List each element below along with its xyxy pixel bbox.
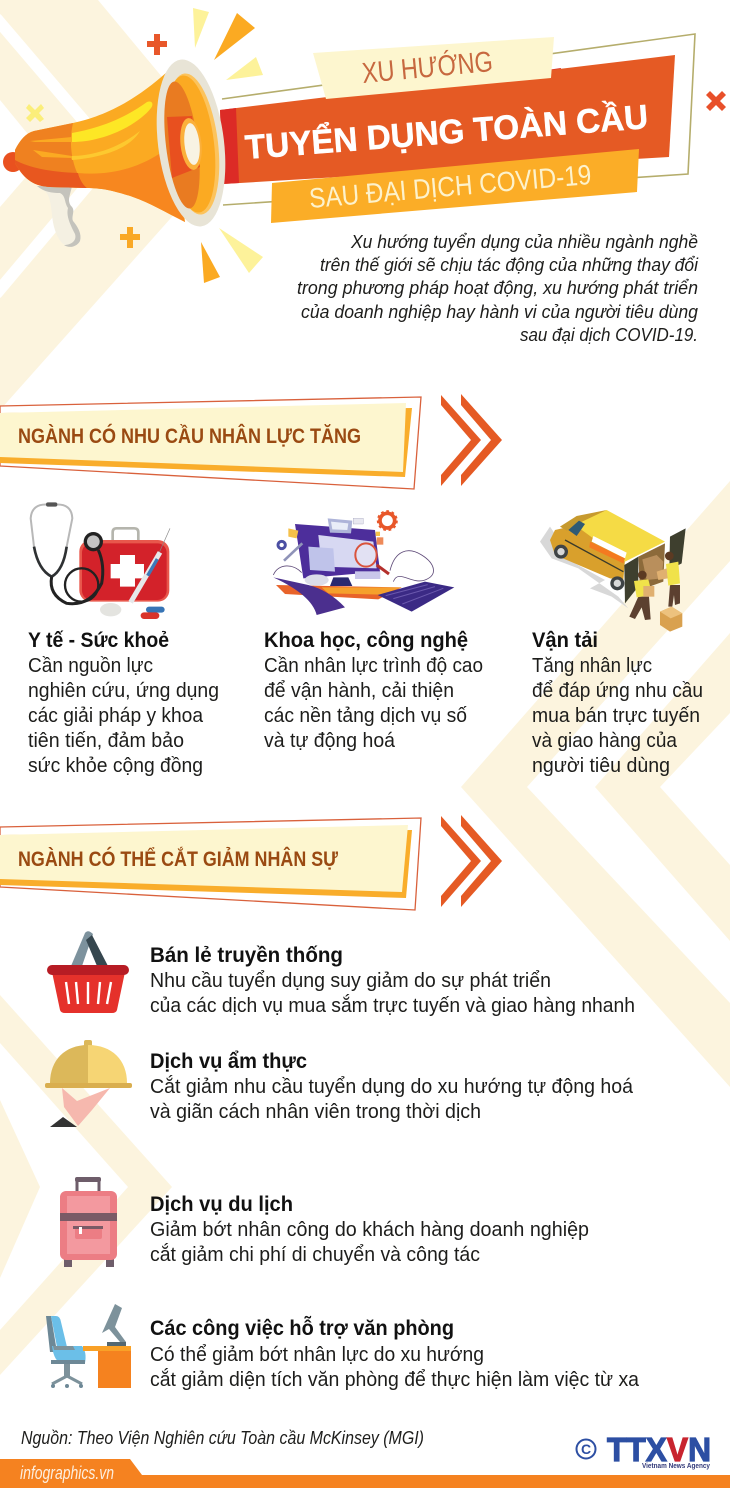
heading: Khoa học, công nghệ <box>264 629 468 652</box>
main title text: TUYỂN DỤNG TOÀN CẦU <box>244 98 649 167</box>
body text: Cắt giảm nhu cầu tuyển dụng do xu hướng tự động hoá <box>150 1075 634 1098</box>
intro paragraph: trên thế giới sẽ chịu tác động của những thay đổi <box>320 255 699 275</box>
heading: Vận tải <box>532 629 598 652</box>
body text <box>150 1344 640 1391</box>
item: traditional retail <box>47 931 635 1017</box>
yellow label <box>271 149 639 223</box>
heading: Bán lẻ truyền thống <box>150 944 343 967</box>
heading: Dịch vụ du lịch <box>150 1193 293 1216</box>
body text: để đáp ứng nhu cầu <box>532 680 703 702</box>
panel: health <box>28 502 219 777</box>
subtitle text: SAU ĐẠI DỊCH COVID-19 <box>308 159 592 214</box>
footer bar: infographics.vn <box>20 1463 114 1483</box>
body text: cắt giảm diện tích văn phòng để thực hiện làm việc từ xa <box>150 1368 640 1391</box>
intro paragraph: của doanh nghiệp hay hành vi của người tiêu dùng <box>301 302 698 322</box>
panel: science and technology <box>264 511 483 752</box>
body text <box>150 1075 634 1123</box>
thin frame <box>222 34 695 205</box>
icon: cloche and hand <box>45 1040 132 1127</box>
arrow: double chevron 1 <box>441 394 502 486</box>
section heading: increasing demand: NGÀNH CÓ NHU CẦU NHÂN LỰC TĂNG <box>18 424 361 448</box>
body text <box>264 655 483 752</box>
logo: TTXVN: TTXVN <box>607 1431 711 1468</box>
icon: suitcase <box>60 1177 117 1267</box>
header banner <box>220 34 695 223</box>
body text: Có thể giảm bớt nhân lực do xu hướng <box>150 1344 484 1366</box>
heading: Dịch vụ ẩm thực <box>150 1050 307 1073</box>
body text: các giải pháp y khoa <box>28 705 204 727</box>
body text: và tự động hoá <box>264 730 396 752</box>
body text: mua bán trực tuyến <box>532 705 700 727</box>
item: office support <box>46 1304 640 1391</box>
body text: Nhu cầu tuyển dụng suy giảm do sự phát triển <box>150 970 551 992</box>
body text: cắt giảm chi phí di chuyển và công tác <box>150 1243 480 1266</box>
body text: Tăng nhân lực <box>532 655 652 677</box>
arrow: double chevron 2 <box>441 815 502 907</box>
body text: và giao hàng của <box>532 730 678 752</box>
body text: người tiêu dùng <box>532 755 670 777</box>
footer bar <box>0 1459 730 1488</box>
icon: medical kit and stethoscope <box>31 502 170 619</box>
orange title ribbon <box>220 55 675 184</box>
bell center <box>178 117 204 171</box>
icon: basket <box>47 931 129 1013</box>
section heading: increasing demand <box>0 397 421 489</box>
panel: transport <box>532 510 703 777</box>
logo: TTXVN: Vietnam News Agency <box>642 1461 711 1470</box>
decorative rays and marks <box>26 8 726 283</box>
icon: office desk <box>46 1304 131 1388</box>
handle <box>37 186 81 247</box>
intro paragraph: trong phương pháp hoạt động, xu hướng phát triển <box>297 278 698 298</box>
body text: của các dịch vụ mua sắm trực tuyến và giao hàng nhanh <box>150 994 635 1017</box>
source note: Nguồn: Theo Viện Nghiên cứu Toàn cầu McKinsey (MGI) <box>21 1428 424 1448</box>
item: food service <box>45 1040 634 1127</box>
heading: Y tế - Sức khoẻ <box>28 629 169 652</box>
icon: delivery van <box>540 510 686 632</box>
icon: computer <box>273 511 454 615</box>
intro paragraph: Xu hướng tuyển dụng của nhiều ngành nghề <box>350 232 698 252</box>
cream label <box>313 37 554 99</box>
body text: Giảm bớt nhân công do khách hàng doanh nghiệp <box>150 1219 589 1241</box>
intro paragraph <box>297 232 699 345</box>
body text: để vận hành, cải thiện <box>264 680 454 702</box>
horn <box>15 72 185 222</box>
body text: tiên tiến, đảm bảo <box>28 730 184 752</box>
logo: TTXVN: C <box>581 1441 591 1457</box>
body text: và giãn cách nhân viên trong thời dịch <box>150 1101 481 1123</box>
kicker text: XU HƯỚNG <box>361 45 494 90</box>
body text: nghiên cứu, ứng dụng <box>28 680 219 702</box>
body text: các nền tảng dịch vụ số <box>264 705 467 727</box>
body text: Cần nguồn lực <box>28 655 153 677</box>
item: tourism <box>60 1177 589 1267</box>
body text: sức khỏe cộng đồng <box>28 755 203 777</box>
body text <box>150 1219 589 1266</box>
section heading: possible cuts <box>0 818 421 910</box>
icon: megaphone <box>3 56 234 247</box>
body text <box>150 970 635 1017</box>
body text: Cần nhân lực trình độ cao <box>264 655 483 677</box>
body text <box>532 655 703 777</box>
heading: Các công việc hỗ trợ văn phòng <box>150 1316 454 1340</box>
intro paragraph: sau đại dịch COVID-19. <box>520 325 698 345</box>
bell ring <box>148 56 234 230</box>
body text <box>28 655 219 777</box>
section heading: possible cuts: NGÀNH CÓ THỂ CẮT GIẢM NHÂN SỰ <box>18 847 338 871</box>
